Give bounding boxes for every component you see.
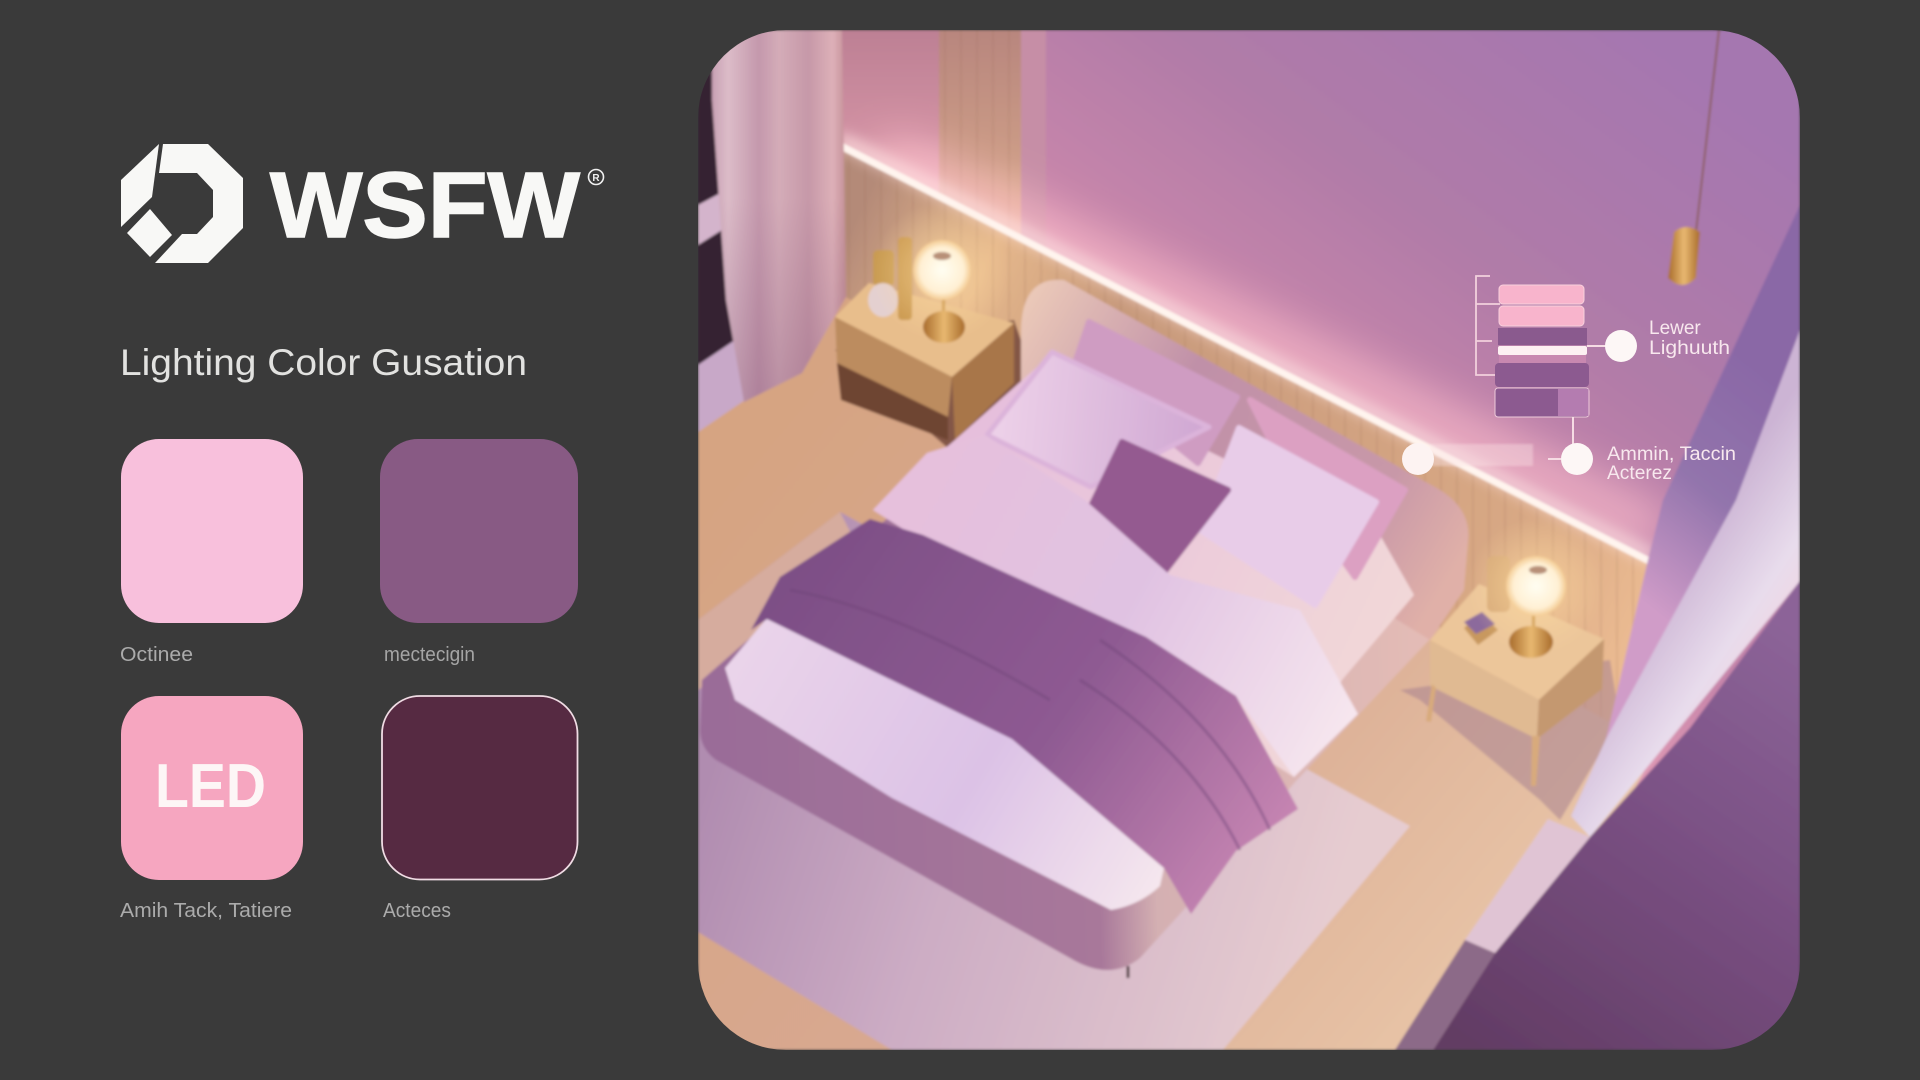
front pillow right bbox=[1200, 428, 1376, 605]
bracket bbox=[1476, 276, 1500, 375]
swatch label: Acteces: Acteces bbox=[383, 900, 451, 922]
right decor bbox=[1464, 556, 1510, 645]
LED glow inner bbox=[839, 139, 1653, 557]
swatch label: mectecigin: mectecigin bbox=[384, 644, 475, 666]
logo: WSFW bbox=[121, 144, 604, 263]
swatch label: Octinee: Octinee bbox=[120, 644, 193, 666]
callout: layer diagram bbox=[1402, 276, 1736, 484]
throw blanket bbox=[751, 519, 1298, 914]
logo wordmark: WSFW bbox=[270, 153, 580, 257]
back pillow right bbox=[1250, 400, 1405, 577]
swatch: dark plum bbox=[382, 696, 578, 880]
smear connector bbox=[1430, 444, 1533, 466]
window sill bbox=[698, 340, 745, 432]
LED strip bbox=[839, 145, 1653, 563]
duvet bbox=[873, 435, 1358, 777]
throw folds bbox=[947, 640, 1272, 851]
swatch: muted purple bbox=[380, 439, 578, 623]
layer: pink top bbox=[1499, 285, 1584, 304]
wood wall beneath LED strip bbox=[839, 145, 1653, 760]
wall panel edge bbox=[1022, 30, 1046, 178]
pendant lamp bbox=[1668, 30, 1719, 285]
dot: lower bbox=[1561, 443, 1593, 475]
callout text: Lewer Lighuuth: Lewer bbox=[1649, 318, 1701, 339]
layer: purple bbox=[1495, 363, 1589, 387]
shadow by right nightstand bbox=[1400, 660, 1620, 820]
connector: base to dot bbox=[1572, 417, 1574, 445]
layer: dark band bbox=[1498, 328, 1587, 345]
swatch label: Amih Tack: Amih Tack, Tatiere bbox=[120, 900, 292, 922]
callout text: Ammin Taccin: Acterez bbox=[1607, 463, 1672, 484]
swatch: LED pink bbox=[121, 696, 303, 880]
registered mark bbox=[588, 170, 604, 184]
left rug strip bbox=[698, 512, 850, 690]
left nightstand bbox=[835, 283, 1014, 440]
bed sheet bbox=[873, 367, 1414, 777]
floor bbox=[698, 296, 1660, 1050]
bed base bbox=[700, 518, 1429, 971]
mattress front bbox=[725, 618, 1164, 910]
left curtains bbox=[712, 30, 846, 402]
logo icon bbox=[121, 144, 243, 263]
dot: upper bbox=[1605, 330, 1637, 362]
connector: short bbox=[1548, 458, 1561, 460]
accent pillow bbox=[1082, 442, 1228, 571]
layer: mid pink bbox=[1499, 355, 1586, 363]
subtitle: Lighting Color Gusation bbox=[120, 342, 527, 383]
bed leg bbox=[1126, 966, 1130, 978]
layer: LED strip bbox=[1498, 346, 1587, 355]
upper left wall bbox=[841, 30, 939, 200]
LED text: LED bbox=[155, 752, 266, 821]
callout text: Ammin Taccin: Ammin, Taccin bbox=[1607, 444, 1736, 465]
right curtain bbox=[1606, 208, 1800, 736]
shadow under left nightstand bbox=[932, 319, 1022, 448]
right lamp bbox=[1482, 533, 1586, 659]
layer: split base bbox=[1495, 388, 1589, 417]
panel: bedroom scene bbox=[698, 30, 1800, 1050]
registered mark: R bbox=[592, 173, 600, 184]
sheer curtain bbox=[1571, 330, 1800, 837]
wall bbox=[1044, 30, 1800, 788]
connector: layer to dot bbox=[1587, 345, 1606, 347]
left decor bbox=[868, 237, 912, 320]
door frame lower bbox=[1395, 940, 1495, 1050]
right nightstand bbox=[1426, 584, 1604, 786]
callout text: Lewer Lighuuth: Lighuuth bbox=[1649, 338, 1730, 359]
rug bbox=[698, 512, 1410, 1050]
headboard bbox=[1021, 280, 1468, 640]
wood slat column bbox=[939, 30, 1021, 245]
door frame upper bbox=[1465, 819, 1590, 953]
front pillow left bbox=[987, 352, 1209, 487]
LED glow bbox=[880, 155, 1660, 535]
layer: pink second bbox=[1499, 306, 1584, 326]
dot: left bbox=[1402, 443, 1434, 475]
window bbox=[698, 68, 735, 366]
lower right wall bbox=[1433, 581, 1800, 1050]
back pillow left bbox=[1075, 322, 1237, 463]
pillows bbox=[987, 322, 1405, 605]
swatch: light pink bbox=[121, 439, 303, 623]
left lamp bbox=[882, 216, 994, 344]
